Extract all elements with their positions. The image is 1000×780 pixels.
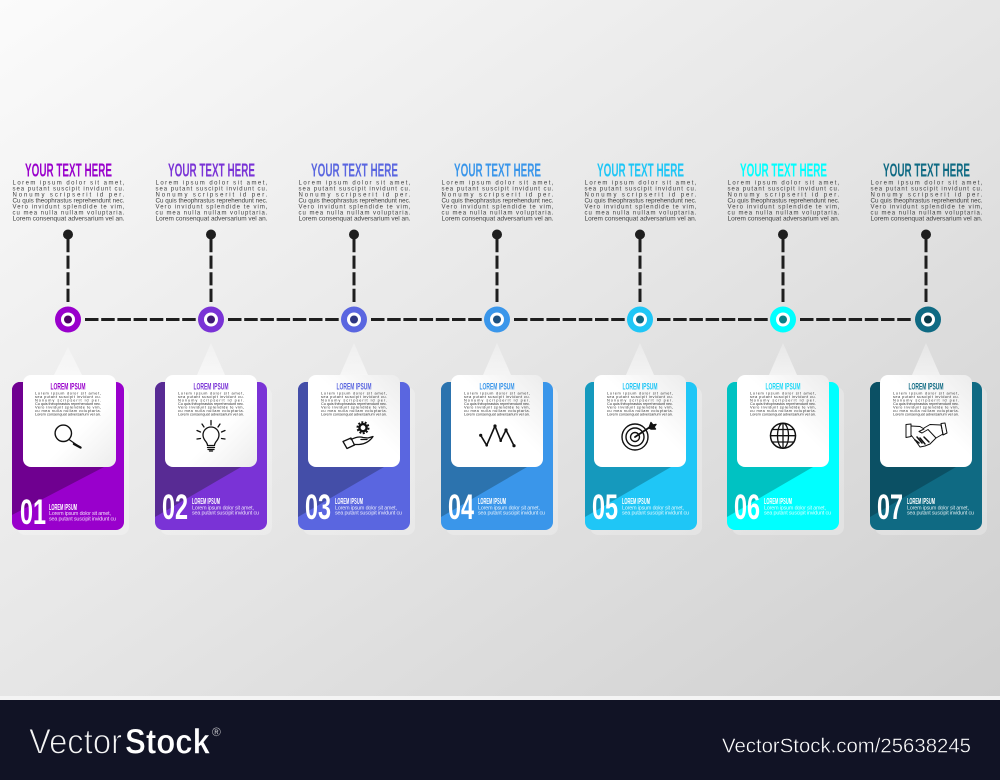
horizontal dashed timeline: [85, 318, 913, 321]
paragraph: [156, 180, 268, 222]
caption: sea putant suscipit invidunt cu: [49, 516, 116, 522]
timeline node: [198, 306, 224, 332]
paragraph: Nonumy scripserit id per.: [156, 192, 268, 198]
paragraph: Nonumy scripserit id per.: [584, 192, 697, 198]
card text: Vero invidunt splendide te vim,: [178, 404, 244, 410]
paragraph: sea putant suscipit invidunt cu.: [442, 186, 554, 192]
paragraph: sea putant suscipit invidunt cu.: [870, 186, 983, 192]
card text: [750, 390, 816, 416]
number: 03: [305, 488, 331, 527]
paragraph: Lorem consenquat adversarium vel an.: [298, 216, 411, 222]
card text: Nonumy scripserit id per.: [750, 398, 816, 402]
card text: cu mea nulla nullam voluptaria.: [464, 408, 530, 413]
paragraph: Lorem ipsum dolor sit amet,: [728, 180, 840, 186]
paragraph: Cu quis theophrastus reprehendunt nec.: [298, 198, 411, 204]
card text: cu mea nulla nullam voluptaria.: [321, 408, 387, 413]
card text: sea putant suscipit invidunt cu.: [893, 394, 959, 399]
card text: sea putant suscipit invidunt cu.: [750, 394, 816, 399]
paragraph: Nonumy scripserit id per.: [12, 192, 125, 198]
card text: Lorem ipsum dolor sit amet,: [750, 390, 816, 396]
card text: cu mea nulla nullam voluptaria.: [893, 408, 959, 413]
paragraph: cu mea nulla nullam voluptaria.: [156, 210, 268, 216]
card text: sea putant suscipit invidunt cu.: [607, 394, 673, 399]
card text: Lorem ipsum dolor sit amet,: [321, 390, 387, 396]
card text: [178, 390, 244, 416]
paragraph: Lorem consenquat adversarium vel an.: [442, 216, 554, 222]
paragraph: Nonumy scripserit id per.: [442, 192, 554, 198]
icon: gear and hand: [343, 422, 373, 448]
paragraph: Lorem consenquat adversarium vel an.: [584, 216, 697, 222]
paragraph: Vero invidunt splendide te vim,: [156, 204, 268, 210]
icon: globe: [770, 423, 796, 448]
paragraph: Lorem ipsum dolor sit amet,: [156, 180, 268, 186]
caption: LOREM IPSUM: [49, 503, 77, 512]
card text: cu mea nulla nullam voluptaria.: [178, 408, 244, 413]
paragraph: [870, 180, 983, 222]
caption: [335, 497, 402, 516]
card text: sea putant suscipit invidunt cu.: [321, 394, 387, 399]
heading: YOUR TEXT HERE: [454, 160, 541, 180]
card text: Lorem consenquat adversarium vel an.: [893, 412, 959, 416]
number: 05: [592, 488, 618, 527]
caption: Lorem ipsum dolor sit amet,: [335, 506, 398, 512]
card text: Nonumy scripserit id per.: [464, 398, 530, 402]
card: [298, 343, 415, 535]
paragraph: Vero invidunt splendide te vim,: [442, 204, 554, 210]
paragraph: [584, 180, 697, 222]
card title: LOREM IPSUM: [194, 382, 229, 392]
card text: Vero invidunt splendide te vim,: [321, 404, 387, 410]
paragraph: Cu quis theophrastus reprehendunt nec.: [442, 198, 554, 204]
paragraph: Cu quis theophrastus reprehendunt nec.: [12, 198, 125, 204]
card: [12, 347, 129, 535]
paragraph: Vero invidunt splendide te vim,: [584, 204, 697, 210]
card text: [321, 390, 387, 416]
caption: LOREM IPSUM: [335, 497, 363, 506]
step 4: [441, 160, 558, 535]
paragraph: Cu quis theophrastus reprehendunt nec.: [584, 198, 697, 204]
heading: YOUR TEXT HERE: [740, 160, 827, 180]
card text: Cu quis theophrastus reprehendunt nec.: [178, 401, 244, 406]
timeline node: [55, 306, 81, 332]
connector pin: [492, 230, 502, 302]
caption: sea putant suscipit invidunt cu: [764, 510, 831, 516]
card text: Lorem consenquat adversarium vel an.: [750, 412, 816, 416]
caption: LOREM IPSUM: [192, 497, 220, 506]
heading: YOUR TEXT HERE: [168, 160, 255, 180]
paragraph: Nonumy scripserit id per.: [298, 192, 411, 198]
caption: [764, 497, 831, 516]
card text: Cu quis theophrastus reprehendunt nec.: [35, 401, 101, 406]
footer image id: VectorStock.com/25638245: [722, 736, 971, 758]
icon: target with dart: [622, 422, 656, 450]
card text: Cu quis theophrastus reprehendunt nec.: [607, 401, 673, 406]
card text: Lorem consenquat adversarium vel an.: [178, 412, 244, 416]
paragraph: [12, 180, 125, 222]
caption: [192, 497, 259, 516]
card text: Lorem consenquat adversarium vel an.: [607, 412, 673, 416]
connector pin: [349, 230, 359, 302]
paragraph: Lorem consenquat adversarium vel an.: [870, 216, 983, 222]
step 6: [727, 160, 844, 535]
card text: Vero invidunt splendide te vim,: [35, 404, 101, 410]
caption: LOREM IPSUM: [907, 497, 935, 506]
paragraph: Vero invidunt splendide te vim,: [728, 204, 840, 210]
number: 02: [162, 488, 188, 527]
card text: Cu quis theophrastus reprehendunt nec.: [464, 401, 530, 406]
card: [441, 343, 558, 535]
icon: magnifier: [55, 425, 80, 448]
card title: LOREM IPSUM: [908, 382, 944, 392]
paragraph: cu mea nulla nullam voluptaria.: [442, 210, 554, 216]
timeline node: [770, 306, 796, 332]
card text: cu mea nulla nullam voluptaria.: [35, 408, 101, 413]
card title: LOREM IPSUM: [480, 382, 515, 392]
number: 06: [734, 488, 760, 527]
card text: Lorem ipsum dolor sit amet,: [464, 390, 530, 396]
step 3: [298, 160, 415, 535]
card text: sea putant suscipit invidunt cu.: [178, 394, 244, 399]
card text: cu mea nulla nullam voluptaria.: [750, 408, 816, 413]
timeline node: [484, 306, 510, 332]
paragraph: Nonumy scripserit id per.: [870, 192, 983, 198]
paragraph: [728, 180, 840, 222]
connector pin: [206, 230, 216, 302]
caption: LOREM IPSUM: [478, 497, 506, 506]
footer logo: Stock: [125, 722, 210, 762]
number: 01: [20, 493, 46, 532]
paragraph: cu mea nulla nullam voluptaria.: [298, 210, 411, 216]
card title: LOREM IPSUM: [336, 382, 372, 392]
footer logo: ®: [212, 725, 221, 739]
caption: [49, 503, 116, 522]
card text: Lorem ipsum dolor sit amet,: [893, 390, 959, 396]
paragraph: Cu quis theophrastus reprehendunt nec.: [728, 198, 840, 204]
caption: Lorem ipsum dolor sit amet,: [907, 506, 970, 512]
caption: sea putant suscipit invidunt cu: [192, 510, 259, 516]
card text: sea putant suscipit invidunt cu.: [35, 394, 101, 399]
card text: Vero invidunt splendide te vim,: [893, 404, 959, 410]
caption: Lorem ipsum dolor sit amet,: [478, 506, 540, 512]
card title: LOREM IPSUM: [766, 382, 801, 392]
card text: Cu quis theophrastus reprehendunt nec.: [893, 401, 959, 406]
paragraph: Cu quis theophrastus reprehendunt nec.: [156, 198, 268, 204]
paragraph: Cu quis theophrastus reprehendunt nec.: [870, 198, 983, 204]
paragraph: Lorem ipsum dolor sit amet,: [870, 180, 983, 186]
caption: LOREM IPSUM: [622, 497, 650, 506]
connector pin: [778, 230, 788, 302]
paragraph: Lorem consenquat adversarium vel an.: [156, 216, 268, 222]
card text: [607, 390, 673, 416]
card: [155, 343, 272, 535]
paragraph: sea putant suscipit invidunt cu.: [728, 186, 840, 192]
card text: Cu quis theophrastus reprehendunt nec.: [321, 401, 387, 406]
card text: [464, 390, 530, 416]
card text: Lorem consenquat adversarium vel an.: [35, 412, 101, 416]
footer logo: Vector: [29, 722, 122, 762]
paragraph: cu mea nulla nullam voluptaria.: [870, 210, 983, 216]
paragraph: sea putant suscipit invidunt cu.: [12, 186, 125, 192]
timeline node: [915, 306, 941, 332]
paragraph: Vero invidunt splendide te vim,: [12, 204, 125, 210]
card text: Lorem ipsum dolor sit amet,: [35, 390, 101, 396]
connector pin: [635, 230, 645, 302]
caption: Lorem ipsum dolor sit amet,: [49, 511, 112, 517]
card title: LOREM IPSUM: [50, 382, 86, 392]
paragraph: Vero invidunt splendide te vim,: [870, 204, 983, 210]
caption: Lorem ipsum dolor sit amet,: [192, 506, 254, 512]
paragraph: Lorem consenquat adversarium vel an.: [728, 216, 840, 222]
card: [870, 343, 987, 535]
card text: Nonumy scripserit id per.: [35, 398, 101, 402]
card text: Nonumy scripserit id per.: [607, 398, 673, 402]
heading: YOUR TEXT HERE: [311, 160, 398, 180]
card text: Nonumy scripserit id per.: [178, 398, 244, 402]
card text: Lorem consenquat adversarium vel an.: [464, 412, 530, 416]
paragraph: sea putant suscipit invidunt cu.: [298, 186, 411, 192]
card text: Lorem ipsum dolor sit amet,: [178, 390, 244, 396]
caption: LOREM IPSUM: [764, 497, 792, 506]
caption: Lorem ipsum dolor sit amet,: [622, 506, 684, 512]
step 7: [870, 160, 987, 535]
card: [585, 343, 702, 535]
caption: [907, 497, 974, 516]
card text: Nonumy scripserit id per.: [321, 398, 387, 402]
step 5: [584, 160, 702, 535]
footer logo: [29, 722, 221, 762]
caption: sea putant suscipit invidunt cu: [478, 510, 545, 516]
card text: [35, 390, 101, 416]
icon: line chart: [479, 424, 516, 447]
paragraph: Lorem ipsum dolor sit amet,: [584, 180, 697, 186]
step 1: [12, 160, 129, 535]
card text: Nonumy scripserit id per.: [893, 398, 959, 402]
step 2: [155, 160, 272, 535]
paragraph: [298, 180, 411, 222]
heading: YOUR TEXT HERE: [25, 160, 112, 180]
card text: Vero invidunt splendide te vim,: [607, 404, 673, 410]
card text: cu mea nulla nullam voluptaria.: [607, 408, 673, 413]
footer bar: [0, 700, 1000, 780]
number: 07: [877, 488, 903, 527]
caption: sea putant suscipit invidunt cu: [335, 510, 402, 516]
heading: YOUR TEXT HERE: [597, 160, 684, 180]
card title: LOREM IPSUM: [622, 382, 658, 392]
card text: sea putant suscipit invidunt cu.: [464, 394, 530, 399]
caption: sea putant suscipit invidunt cu: [622, 510, 689, 516]
caption: [478, 497, 545, 516]
card text: Lorem consenquat adversarium vel an.: [321, 412, 387, 416]
timeline node: [627, 306, 653, 332]
connector pin: [63, 230, 73, 302]
card text: Vero invidunt splendide te vim,: [464, 404, 530, 410]
paragraph: cu mea nulla nullam voluptaria.: [728, 210, 840, 216]
number: 04: [448, 488, 474, 527]
paragraph: Nonumy scripserit id per.: [728, 192, 840, 198]
paragraph: sea putant suscipit invidunt cu.: [584, 186, 697, 192]
timeline node: [341, 306, 367, 332]
card text: [893, 390, 959, 416]
paragraph: Lorem consenquat adversarium vel an.: [12, 216, 125, 222]
card text: Lorem ipsum dolor sit amet,: [607, 390, 673, 396]
paragraph: Vero invidunt splendide te vim,: [298, 204, 411, 210]
caption: Lorem ipsum dolor sit amet,: [764, 506, 826, 512]
paragraph: sea putant suscipit invidunt cu.: [156, 186, 268, 192]
caption: sea putant suscipit invidunt cu: [907, 510, 974, 516]
card text: Cu quis theophrastus reprehendunt nec.: [750, 401, 816, 406]
card text: Vero invidunt splendide te vim,: [750, 404, 816, 410]
paragraph: Lorem ipsum dolor sit amet,: [298, 180, 411, 186]
paragraph: cu mea nulla nullam voluptaria.: [12, 210, 125, 216]
paragraph: [442, 180, 554, 222]
paragraph: cu mea nulla nullam voluptaria.: [584, 210, 697, 216]
icon: handshake: [906, 423, 947, 447]
connector pin: [921, 230, 931, 302]
caption: [622, 497, 689, 516]
card: [727, 343, 844, 535]
paragraph: Lorem ipsum dolor sit amet,: [12, 180, 125, 186]
icon: light bulb: [197, 420, 225, 451]
paragraph: Lorem ipsum dolor sit amet,: [442, 180, 554, 186]
